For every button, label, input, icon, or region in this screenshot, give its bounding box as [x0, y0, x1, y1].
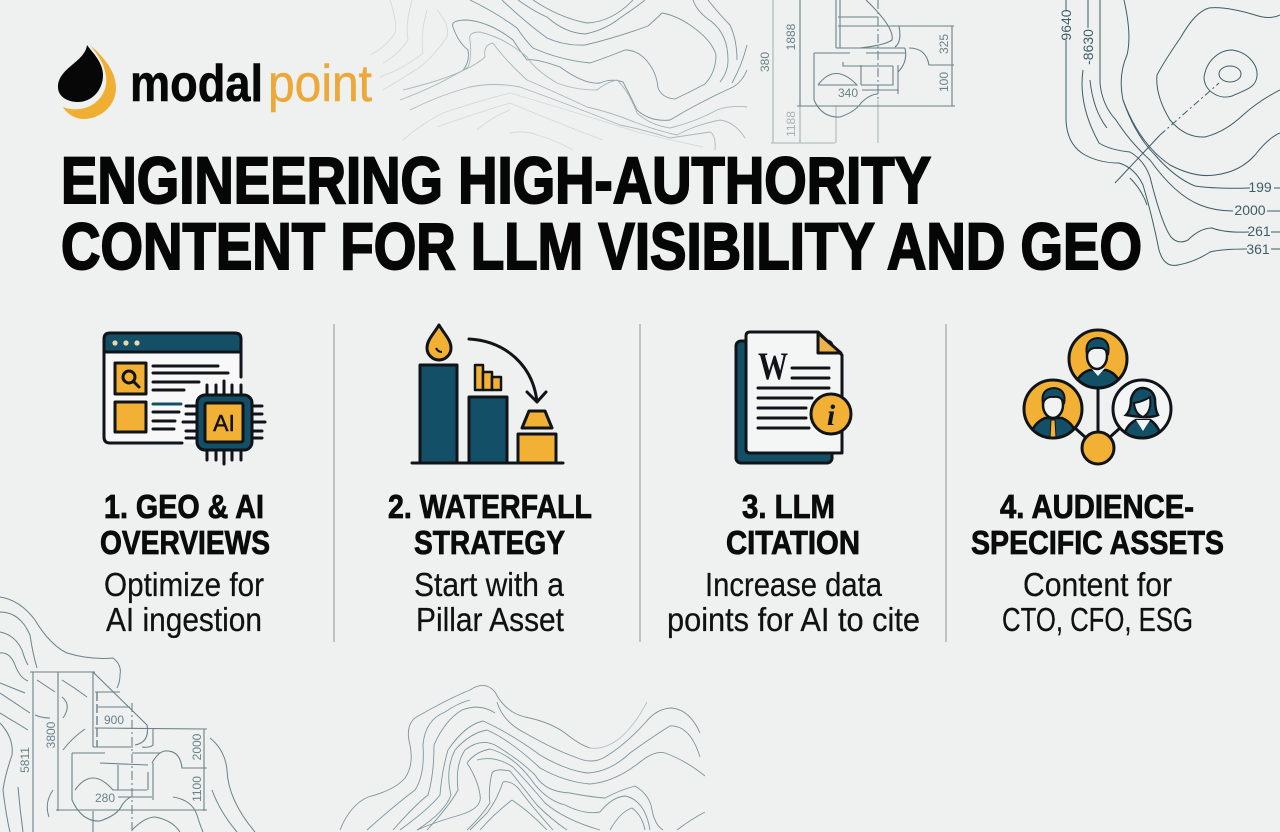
- dimension labels: 340: [838, 86, 858, 100]
- person: top: [1069, 330, 1127, 392]
- description: AI ingestion: [106, 601, 262, 638]
- contour map: top centre: [370, 0, 747, 150]
- dimension labels: [18, 713, 204, 805]
- description: [104, 566, 264, 638]
- heading: STRATEGY: [414, 524, 565, 561]
- title: [61, 143, 1142, 283]
- person: right: [1113, 380, 1171, 442]
- dimension labels: [758, 23, 951, 137]
- dimension labels: 100: [937, 72, 951, 92]
- wordmark: modal: [130, 55, 263, 113]
- heading: [100, 488, 270, 561]
- heading: SPECIFIC ASSETS: [971, 524, 1224, 561]
- description: Optimize for: [104, 566, 264, 603]
- title: ENGINEERING HIGH-AUTHORITY: [61, 143, 931, 217]
- contour labels: 2000: [1234, 202, 1266, 218]
- description: Content for: [1023, 566, 1172, 603]
- dimension labels: 2000: [190, 733, 204, 760]
- column dividers: [334, 324, 946, 642]
- heading: 4. AUDIENCE-: [1000, 488, 1194, 525]
- heading: 1. GEO & AI: [104, 488, 264, 525]
- description: [414, 566, 565, 638]
- contour map: top right: [1058, 0, 1280, 265]
- blueprint: bottom left: [18, 672, 207, 832]
- heading: 3. LLM: [742, 488, 835, 525]
- icon: audience network: [1024, 330, 1171, 464]
- contour labels: 261: [1247, 223, 1271, 239]
- panel: Waterfall Strategy: [388, 325, 592, 638]
- dimension labels: 900: [104, 713, 124, 727]
- icon: cited document: [736, 332, 851, 463]
- contour map: bottom left: [0, 597, 255, 832]
- panel: LLM Citation: [667, 332, 920, 638]
- dimension labels: 325: [937, 34, 951, 54]
- dimension labels: 1188: [784, 111, 798, 137]
- contour labels: 361: [1246, 241, 1270, 257]
- contour map: bottom centre: [340, 685, 705, 830]
- heading: 2. WATERFALL: [388, 488, 592, 525]
- blueprint: top: [758, 0, 955, 143]
- heading: [388, 488, 592, 561]
- description: Start with a: [414, 566, 565, 603]
- description: CTO, CFO, ESG: [1002, 601, 1193, 638]
- description: [667, 566, 920, 638]
- dimension labels: 1100: [190, 776, 204, 802]
- description: [1002, 566, 1193, 638]
- icon: cited document: W: [758, 345, 788, 388]
- contour labels: 199: [1248, 179, 1272, 195]
- contour labels: -8630: [1080, 29, 1096, 65]
- icon: browser with AI chip: AI: [213, 410, 235, 436]
- description: Increase data: [705, 566, 883, 603]
- panel: GEO and AI Overviews: [100, 333, 270, 638]
- dimension labels: 280: [95, 791, 115, 805]
- heading: [971, 488, 1224, 561]
- description: points for AI to cite: [667, 601, 920, 638]
- dimension labels: 5811: [18, 747, 32, 773]
- contour labels: 9640: [1058, 9, 1074, 41]
- icon: cited document: i: [827, 399, 836, 432]
- panel: Audience-Specific Assets: [971, 330, 1224, 638]
- dimension labels: 3800: [44, 721, 58, 748]
- icon: browser with AI chip: [104, 333, 265, 464]
- dimension labels: 380: [758, 52, 772, 72]
- description: Pillar Asset: [416, 601, 564, 638]
- heading: OVERVIEWS: [100, 524, 270, 561]
- heading: CITATION: [726, 524, 860, 561]
- icon: oil drop: [58, 45, 116, 119]
- wordmark: [130, 55, 373, 113]
- person: left: [1024, 380, 1082, 442]
- dimension labels: 1888: [784, 23, 798, 50]
- heading: [726, 488, 860, 561]
- wordmark: point: [268, 55, 373, 113]
- icon: waterfall bars and arrow: [412, 325, 563, 463]
- logo: [58, 45, 373, 119]
- contour labels: [1058, 9, 1272, 257]
